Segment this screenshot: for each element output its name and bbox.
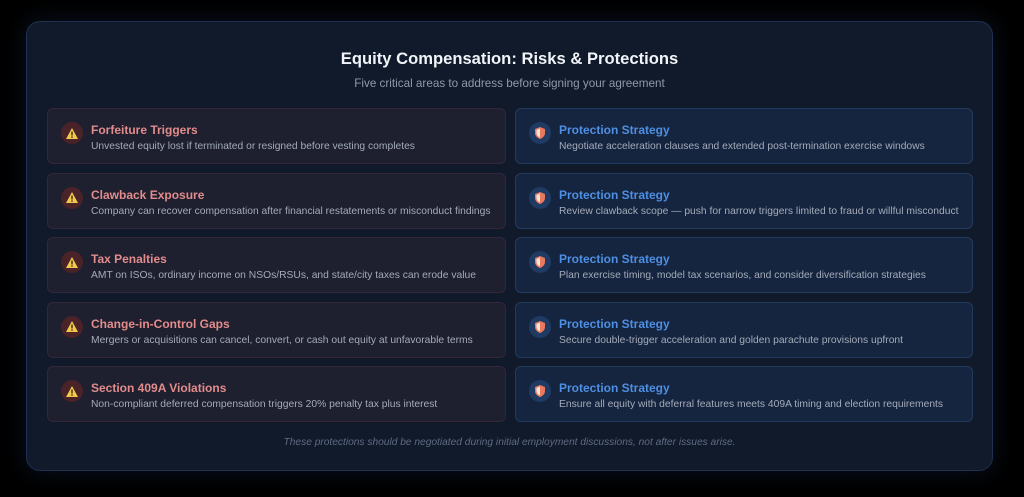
subtitle: Five critical areas to address before signing your agreement <box>354 77 665 90</box>
risk card: clawback: Clawback Exposure <box>91 188 204 202</box>
title: Equity Compensation: Risks & Protections <box>341 49 678 68</box>
risk card: tax: AMT on ISOs, ordinary income on NSOs/RSUs, and state/city taxes can erode value <box>91 270 476 281</box>
protection card 3: Protection Strategy <box>559 252 670 266</box>
risk card: clawback <box>47 172 506 228</box>
protection card 5 <box>515 366 973 422</box>
protection card 2: Review clawback scope — push for narrow triggers limited to fraud or willful misconduct <box>559 206 958 216</box>
risk card: 409A <box>47 366 506 422</box>
protection card 2: Protection Strategy <box>559 188 670 202</box>
protection card 1: Protection Strategy <box>559 123 670 137</box>
risk card: tax <box>47 237 506 293</box>
risk card: forfeiture <box>47 108 506 164</box>
protection card 2 <box>515 172 973 228</box>
protection card 4: Protection Strategy <box>559 316 670 330</box>
protection card 5: Ensure all equity with deferral features meets 409A timing and election requirements <box>559 399 943 410</box>
risk card: change in control: Change-in-Control Gaps <box>91 316 230 330</box>
footer note: These protections should be negotiated during initial employment discussions, not after issues arise. <box>284 437 735 448</box>
protection card 4: Secure double-trigger acceleration and golden parachute provisions upfront <box>559 334 903 346</box>
risk card: change in control: Mergers or acquisitions can cancel, convert, or cash out equity at unfavorable terms <box>91 334 473 346</box>
protection card 1 <box>515 108 973 164</box>
protection card 4 <box>515 302 973 358</box>
risk card: forfeiture: Unvested equity lost if terminated or resigned before vesting completes <box>91 141 415 152</box>
protection card 3 <box>515 237 973 293</box>
risk card: clawback: Company can recover compensation after financial restatements or misconduct findings <box>91 206 490 216</box>
protection card 3: Plan exercise timing, model tax scenarios, and consider diversification strategies <box>559 270 926 281</box>
risk card: change in control <box>47 302 506 358</box>
risk card: 409A: Non-compliant deferred compensation triggers 20% penalty tax plus interest <box>91 399 437 410</box>
risk card: forfeiture: Forfeiture Triggers <box>91 123 198 137</box>
protection card 1: Negotiate acceleration clauses and extended post-termination exercise windows <box>559 141 925 152</box>
protection card 5: Protection Strategy <box>559 381 670 395</box>
risk card: tax: Tax Penalties <box>91 252 167 266</box>
risk card: 409A: Section 409A Violations <box>91 381 226 395</box>
